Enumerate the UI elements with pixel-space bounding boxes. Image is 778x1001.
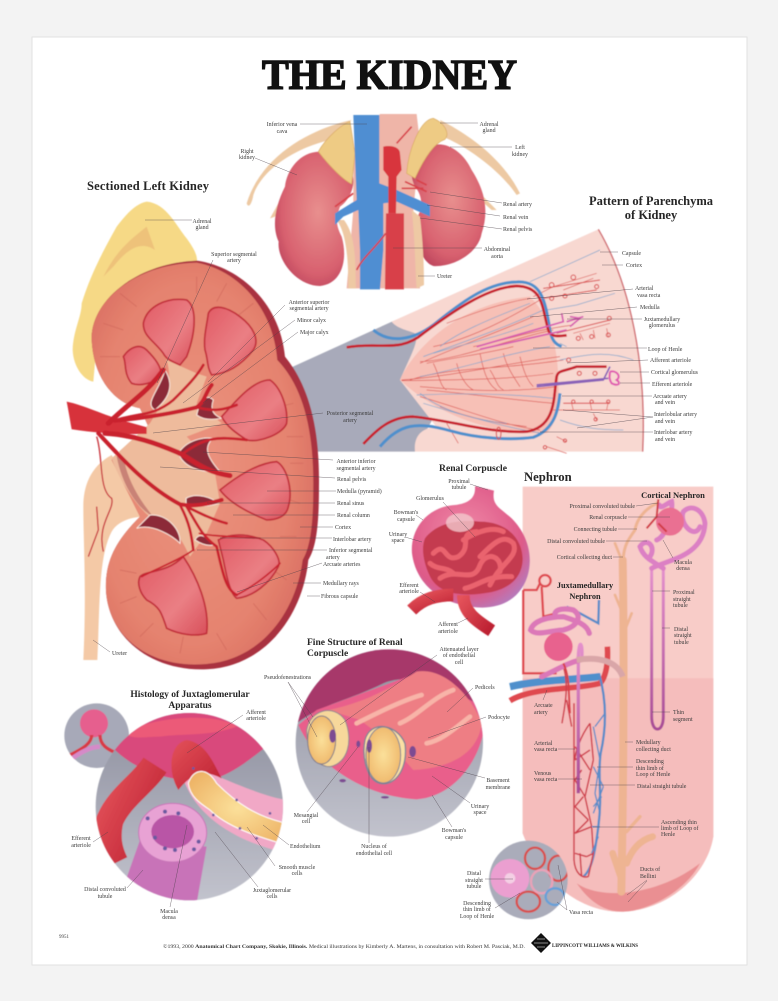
labels: fine structure <box>264 647 511 857</box>
labels: sectioned kidney: Minor calyx <box>297 318 326 324</box>
labels: nephron: Arcuate <box>534 703 553 709</box>
labels: nephron: thin limb of <box>636 765 664 772</box>
panel: nephron block <box>510 487 713 912</box>
labels: parenchyma: and vein <box>655 400 675 406</box>
nuclei <box>146 767 271 852</box>
afferent stem <box>563 663 570 713</box>
labels: sectioned kidney: Fibrous capsule <box>321 594 359 600</box>
heading: cortical nephron: Cortical Nephron <box>641 490 705 500</box>
upper red rim <box>123 718 237 737</box>
juxtamedullary convolutions <box>531 609 589 677</box>
labels: nephron: Vasa recta <box>569 910 593 916</box>
labels: nephron: Renal corpuscle <box>589 515 627 521</box>
labels: nephron: Arterial <box>534 741 553 747</box>
labels: renal corpuscle: Bowman's <box>394 510 419 516</box>
labels: parenchyma: Medulla <box>640 305 660 311</box>
efferent arteriole <box>108 765 155 863</box>
labels: nephron: Distal straight tubule <box>637 784 687 790</box>
labels: kidneys overview: Left <box>515 144 525 151</box>
juxtamedullary straight limbs <box>578 633 589 793</box>
labels: nephron: Bellini <box>640 874 656 880</box>
segmental arteries <box>98 365 280 595</box>
labels: nephron: straight <box>674 633 692 639</box>
macula densa lumen <box>151 815 194 848</box>
labels: nephron: tubule <box>673 603 688 609</box>
heading: fine structure: Fine Structure of Renal <box>307 638 403 648</box>
disc background <box>296 649 483 837</box>
collecting duct <box>613 503 657 892</box>
labels: parenchyma: Interlobular artery <box>654 412 697 418</box>
panel: posterior abdominal kidneys <box>247 114 520 289</box>
labels: fine structure: Podocyte <box>488 715 510 721</box>
labels: nephron: Venous <box>534 771 552 777</box>
heading: juxtamedullary nephron <box>557 581 614 601</box>
labels: nephron: vasa recta <box>534 777 558 783</box>
afferent lumen <box>188 771 287 845</box>
labels: nephron: collecting duct <box>636 747 671 753</box>
labels: histology: densa <box>162 915 176 921</box>
panel: sectioned left kidney illustration <box>67 202 319 669</box>
labels: fine structure: space <box>473 810 487 816</box>
labels: parenchyma: Efferent arteriole <box>652 381 693 388</box>
abdominal aorta and renal arteries <box>335 127 427 289</box>
heading: nephron: Nephron <box>524 470 572 484</box>
labels: sectioned kidney: Anterior inferior <box>336 458 376 465</box>
labels: parenchyma: vasa recta <box>637 293 661 299</box>
maroon upper field <box>293 649 483 727</box>
labels: kidneys overview: Renal vein <box>503 215 528 221</box>
labels: sectioned kidney: Cortex <box>335 525 351 531</box>
basement band <box>298 673 483 799</box>
publisher logo: LIPPINCOTT WILLIAMS & WILKINS <box>552 943 638 949</box>
labels: histology: Macula <box>160 909 178 915</box>
cortical renal corpuscle <box>656 508 684 536</box>
labels: histology: arteriole <box>71 843 91 849</box>
heading: juxtamedullary nephron: Nephron <box>569 592 601 601</box>
podocyte surface <box>328 671 482 770</box>
corpuscle pink cap <box>114 712 264 779</box>
vasa recta venous links <box>592 713 605 853</box>
tubule rings <box>491 848 568 912</box>
labels: nephron: artery <box>534 710 548 716</box>
panel: nephron cross-section inset <box>489 841 568 919</box>
labels: fine structure: Pseudofenestrations <box>264 674 312 681</box>
labels: nephron: Distal <box>467 871 481 877</box>
arcuate veins <box>373 282 562 447</box>
proximal tubule neck and capsule <box>412 486 530 608</box>
interlobular and vasa recta fan <box>402 273 620 453</box>
heading: histology <box>130 690 250 711</box>
highlight <box>446 513 474 532</box>
footer credit: ©1993, 2000 Anatomical Chart Company, Skokie, Illinois. Medical illustrations by Kimberly A. Martens, in consultation with Robert M. Pasciak, M.D. <box>163 943 525 950</box>
labels: sectioned kidney: Renal column <box>337 513 370 519</box>
calyx hollows <box>117 457 153 517</box>
afferent arteriole <box>463 595 492 631</box>
labels: renal corpuscle: Efferent <box>399 582 419 589</box>
labels: nephron: Distal <box>674 627 688 633</box>
juxtamedullary nephron loop <box>477 313 583 349</box>
labels: sectioned kidney: Posterior segmental <box>327 411 374 417</box>
heading: histology: Histology of Juxtaglomerular <box>130 690 250 700</box>
labels: nephron: Ascending thin <box>661 820 697 826</box>
left capillary lumen <box>308 716 336 764</box>
labels: nephron: Ducts of <box>640 866 660 873</box>
labels: renal corpuscle: tubule <box>452 485 467 491</box>
labels: fine structure: Urinary <box>471 804 489 810</box>
foot process highlights <box>357 690 470 743</box>
labels: nephron: straight <box>465 878 483 884</box>
labels: histology: tubule <box>98 894 113 900</box>
labels: sectioned kidney: Major calyx <box>300 330 329 336</box>
inset disc <box>489 841 568 919</box>
capsule rim <box>92 261 319 669</box>
labels: sectioned kidney: Inferior segmental <box>329 547 373 554</box>
afferent arteriole upper <box>171 740 222 790</box>
panel: pattern of parenchyma wedge <box>290 229 643 453</box>
labels: parenchyma: Afferent arteriole <box>650 357 691 364</box>
labels: sectioned kidney: artery <box>227 258 241 264</box>
panel: fine structure of renal corpuscle illustration <box>293 649 483 837</box>
heading: sectioned left kidney: Sectioned Left Kidney <box>87 179 210 193</box>
labels: nephron: limb of Loop of <box>661 825 699 832</box>
labels: nephron: Connecting tubule <box>574 527 617 533</box>
labels: renal corpuscle: arteriole <box>438 629 458 635</box>
labels: parenchyma: Arterial <box>635 286 654 292</box>
labels: nephron <box>460 504 699 920</box>
labels: nephron: straight <box>673 597 691 603</box>
labels: nephron: Thin <box>673 710 684 716</box>
labels: sectioned kidney: Arcuate arteries <box>323 562 361 568</box>
macula densa ring <box>139 803 207 862</box>
left kidney <box>412 144 485 266</box>
labels: sectioned kidney: Superior segmental <box>211 252 257 258</box>
papilla rim <box>577 863 700 912</box>
leader lines <box>93 123 673 910</box>
labels: sectioned kidney: Ureter <box>112 651 127 657</box>
heading: pattern of parenchyma <box>589 194 714 222</box>
cortical nephron loop <box>537 367 619 387</box>
labels: sectioned kidney: artery <box>326 555 340 561</box>
labels: renal corpuscle <box>389 479 470 635</box>
labels: fine structure: Mesangial <box>294 813 319 819</box>
labels: renal corpuscle: Proximal <box>448 479 470 485</box>
labels: renal corpuscle: Glomerulus <box>416 496 445 502</box>
cortical nephron convolutions <box>640 502 705 568</box>
labels: nephron: vasa recta <box>534 747 558 753</box>
labels: renal corpuscle: capsule <box>397 517 415 523</box>
labels: nephron: tubule <box>467 884 482 890</box>
publisher logo <box>531 933 638 953</box>
right kidney <box>275 152 353 286</box>
labels: sectioned kidney: segmental artery <box>336 466 376 472</box>
labels: parenchyma: Arcuate artery <box>653 394 687 400</box>
labels: nephron: Distal convoluted tubule <box>547 539 605 545</box>
capillary loops <box>430 529 514 588</box>
labels: nephron: Proximal convoluted tubule <box>570 504 635 510</box>
labels: histology: Efferent <box>71 835 91 842</box>
labels: parenchyma: Cortex <box>626 263 642 269</box>
vasa recta network <box>562 667 593 877</box>
labels: parenchyma: Loop of Henle <box>648 346 683 353</box>
labels: nephron: tubule <box>674 640 689 646</box>
labels: sectioned kidney: Anterior superior <box>289 300 329 306</box>
labels: renal corpuscle: Afferent <box>438 621 458 628</box>
labels: histology: Afferent <box>246 709 266 716</box>
labels: parenchyma: glomerulus <box>649 323 676 329</box>
labels: kidneys overview: Renal pelvis <box>503 227 533 233</box>
labels: histology: cells <box>292 871 303 877</box>
labels: sectioned kidney: Interlobar artery <box>333 537 371 543</box>
heading: pattern of parenchyma: of Kidney <box>625 208 678 222</box>
labels: fine structure: Basement <box>486 778 510 784</box>
labels: kidneys overview: kidney <box>239 155 255 161</box>
heading: juxtamedullary nephron: Juxtamedullary <box>557 581 614 590</box>
panel: histology of juxtaglomerular apparatus illustration <box>64 703 287 903</box>
efferent arteriole <box>412 595 453 610</box>
labels: kidneys overview: kidney <box>512 152 528 158</box>
labels: kidneys overview: Renal artery <box>503 202 532 208</box>
labels: nephron: Loop of Henle <box>460 913 495 920</box>
labels: fine structure: Bowman's <box>442 828 467 834</box>
juxtamedullary arcuate vein <box>510 677 600 687</box>
labels: nephron: thin limb of <box>463 906 491 913</box>
arcuate arteries <box>347 286 607 444</box>
labels: nephron: Henle <box>661 832 675 838</box>
labels: nephron: Proximal <box>673 590 695 596</box>
ureters <box>337 210 424 288</box>
labels: sectioned kidney: Renal sinus <box>337 501 365 507</box>
labels: fine structure: Pedicels <box>475 685 495 691</box>
locator inset contents <box>70 709 117 760</box>
labels: histology: Smooth muscle <box>279 865 316 871</box>
labels: sectioned kidney: Renal pelvis <box>337 477 367 483</box>
juxtamedullary arcuate artery <box>510 647 608 701</box>
panel: renal corpuscle illustration <box>412 486 530 631</box>
heading: fine structure: Corpuscle <box>307 649 348 659</box>
medulla zone <box>523 678 713 912</box>
locator inset disc <box>64 703 129 768</box>
interlobular artery and glomerulus <box>523 575 557 673</box>
labels: kidneys overview: Ureter <box>437 274 452 280</box>
diaphragm crura <box>247 120 520 218</box>
labels: nephron: densa <box>676 566 690 572</box>
cortical nephron straight limbs <box>652 568 663 729</box>
grey hilum background <box>290 321 467 452</box>
pink wedge <box>392 229 643 452</box>
adrenal gland <box>73 202 197 382</box>
ureter <box>83 455 147 660</box>
labels: sectioned kidney: gland <box>195 225 209 231</box>
renal pyramids <box>123 299 290 635</box>
labels: renal corpuscle: arteriole <box>399 589 419 595</box>
labels: nephron: Macula <box>674 560 692 566</box>
interlobular glomeruli <box>496 275 611 449</box>
renal sinus <box>112 360 222 557</box>
muscle backdrop <box>347 114 420 288</box>
main disc <box>96 713 283 900</box>
labels: kidneys overview: Abdominal <box>484 247 511 253</box>
labels: sectioned kidney: artery <box>343 418 357 424</box>
left capillary wall <box>307 711 349 767</box>
labels: histology: cells <box>267 894 278 900</box>
right capillary lumen <box>366 727 401 783</box>
labels: kidneys overview: Right <box>240 149 254 155</box>
heading: histology: Apparatus <box>168 701 212 711</box>
labels: fine structure: capsule <box>445 835 463 841</box>
labels: fine structure: membrane <box>486 785 511 791</box>
labels: parenchyma: and vein <box>655 419 675 425</box>
labels: sectioned kidney: segmental artery <box>289 306 329 312</box>
labels: fine structure: Attenuated layer <box>439 647 479 653</box>
glomerulus tuft <box>423 521 523 594</box>
labels: histology: Juxtaglomerular <box>253 888 291 894</box>
labels: fine structure: Nucleus of <box>361 843 387 850</box>
capsule edge <box>598 229 643 452</box>
cortical arterioles <box>647 499 667 532</box>
ureter vessel <box>88 437 112 557</box>
block background <box>523 487 713 912</box>
juxtamedullary vein <box>567 600 605 877</box>
labels: parenchyma: Interlobar artery <box>654 430 692 436</box>
labels: parenchyma <box>622 251 699 443</box>
renal artery trunk <box>67 402 147 434</box>
labels: fine structure: endothelial cell <box>356 851 392 857</box>
labels: parenchyma: and vein <box>655 437 675 443</box>
labels: kidneys overview: gland <box>482 128 496 134</box>
labels: fine structure: cell <box>455 660 464 666</box>
calyx shadow slits <box>137 370 222 545</box>
cortex <box>92 263 313 665</box>
labels: kidneys overview: Adrenal <box>480 122 499 128</box>
labels: histology: Endothelium <box>290 844 321 850</box>
cell sheath of afferent arteriole <box>184 773 284 850</box>
labels: histology <box>71 709 321 921</box>
descending tan limb <box>577 659 623 677</box>
labels: nephron: Loop of Henle <box>636 771 671 778</box>
juxtamedullary corpuscle <box>544 632 573 661</box>
labels: sectioned kidney: Adrenal <box>193 219 212 225</box>
labels: parenchyma: Capsule <box>622 251 641 257</box>
labels: fine structure: cell <box>302 819 311 825</box>
labels: histology: Distal convoluted <box>84 887 126 893</box>
labels: parenchyma: Cortical glomerulus <box>651 370 699 376</box>
labels: sectioned kidney: Medullary rays <box>323 581 360 587</box>
catalog number: 9951 <box>59 935 70 940</box>
labels: nephron: Medullary <box>636 740 661 746</box>
labels: kidneys overview: Inferior vena <box>267 121 298 128</box>
heading: renal corpuscle: Renal Corpuscle <box>439 463 508 474</box>
labels: nephron: Descending <box>463 901 491 907</box>
inferior vena cava and renal veins <box>335 115 430 289</box>
labels: kidneys overview <box>239 121 533 280</box>
labels: nephron: segment <box>673 717 693 723</box>
medulla <box>400 297 559 433</box>
right capillary wall <box>364 727 406 784</box>
labels: nephron: Descending <box>636 759 664 765</box>
labels: sectioned kidney: Medulla (pyramid) <box>337 488 382 495</box>
labels: parenchyma: Juxtamedullary <box>644 317 680 323</box>
heading: fine structure <box>307 638 403 659</box>
labels: renal corpuscle: space <box>391 538 405 544</box>
adrenal glands <box>318 118 447 184</box>
endothelial nuclei <box>329 729 416 799</box>
labels: nephron: Cortical collecting duct <box>557 555 612 561</box>
labels: renal corpuscle: Urinary <box>389 532 407 538</box>
labels: kidneys overview: aorta <box>491 254 503 260</box>
title: THE KIDNEY <box>262 53 517 99</box>
heading: pattern of parenchyma: Pattern of Parenchyma <box>589 194 714 208</box>
tubule shaft <box>126 842 207 901</box>
labels: histology: arteriole <box>246 716 266 722</box>
labels: fine structure: of endothelial <box>443 652 476 659</box>
medullary rays <box>100 277 303 653</box>
labels: sectioned kidney <box>112 219 382 657</box>
labels: kidneys overview: cava <box>277 129 288 135</box>
